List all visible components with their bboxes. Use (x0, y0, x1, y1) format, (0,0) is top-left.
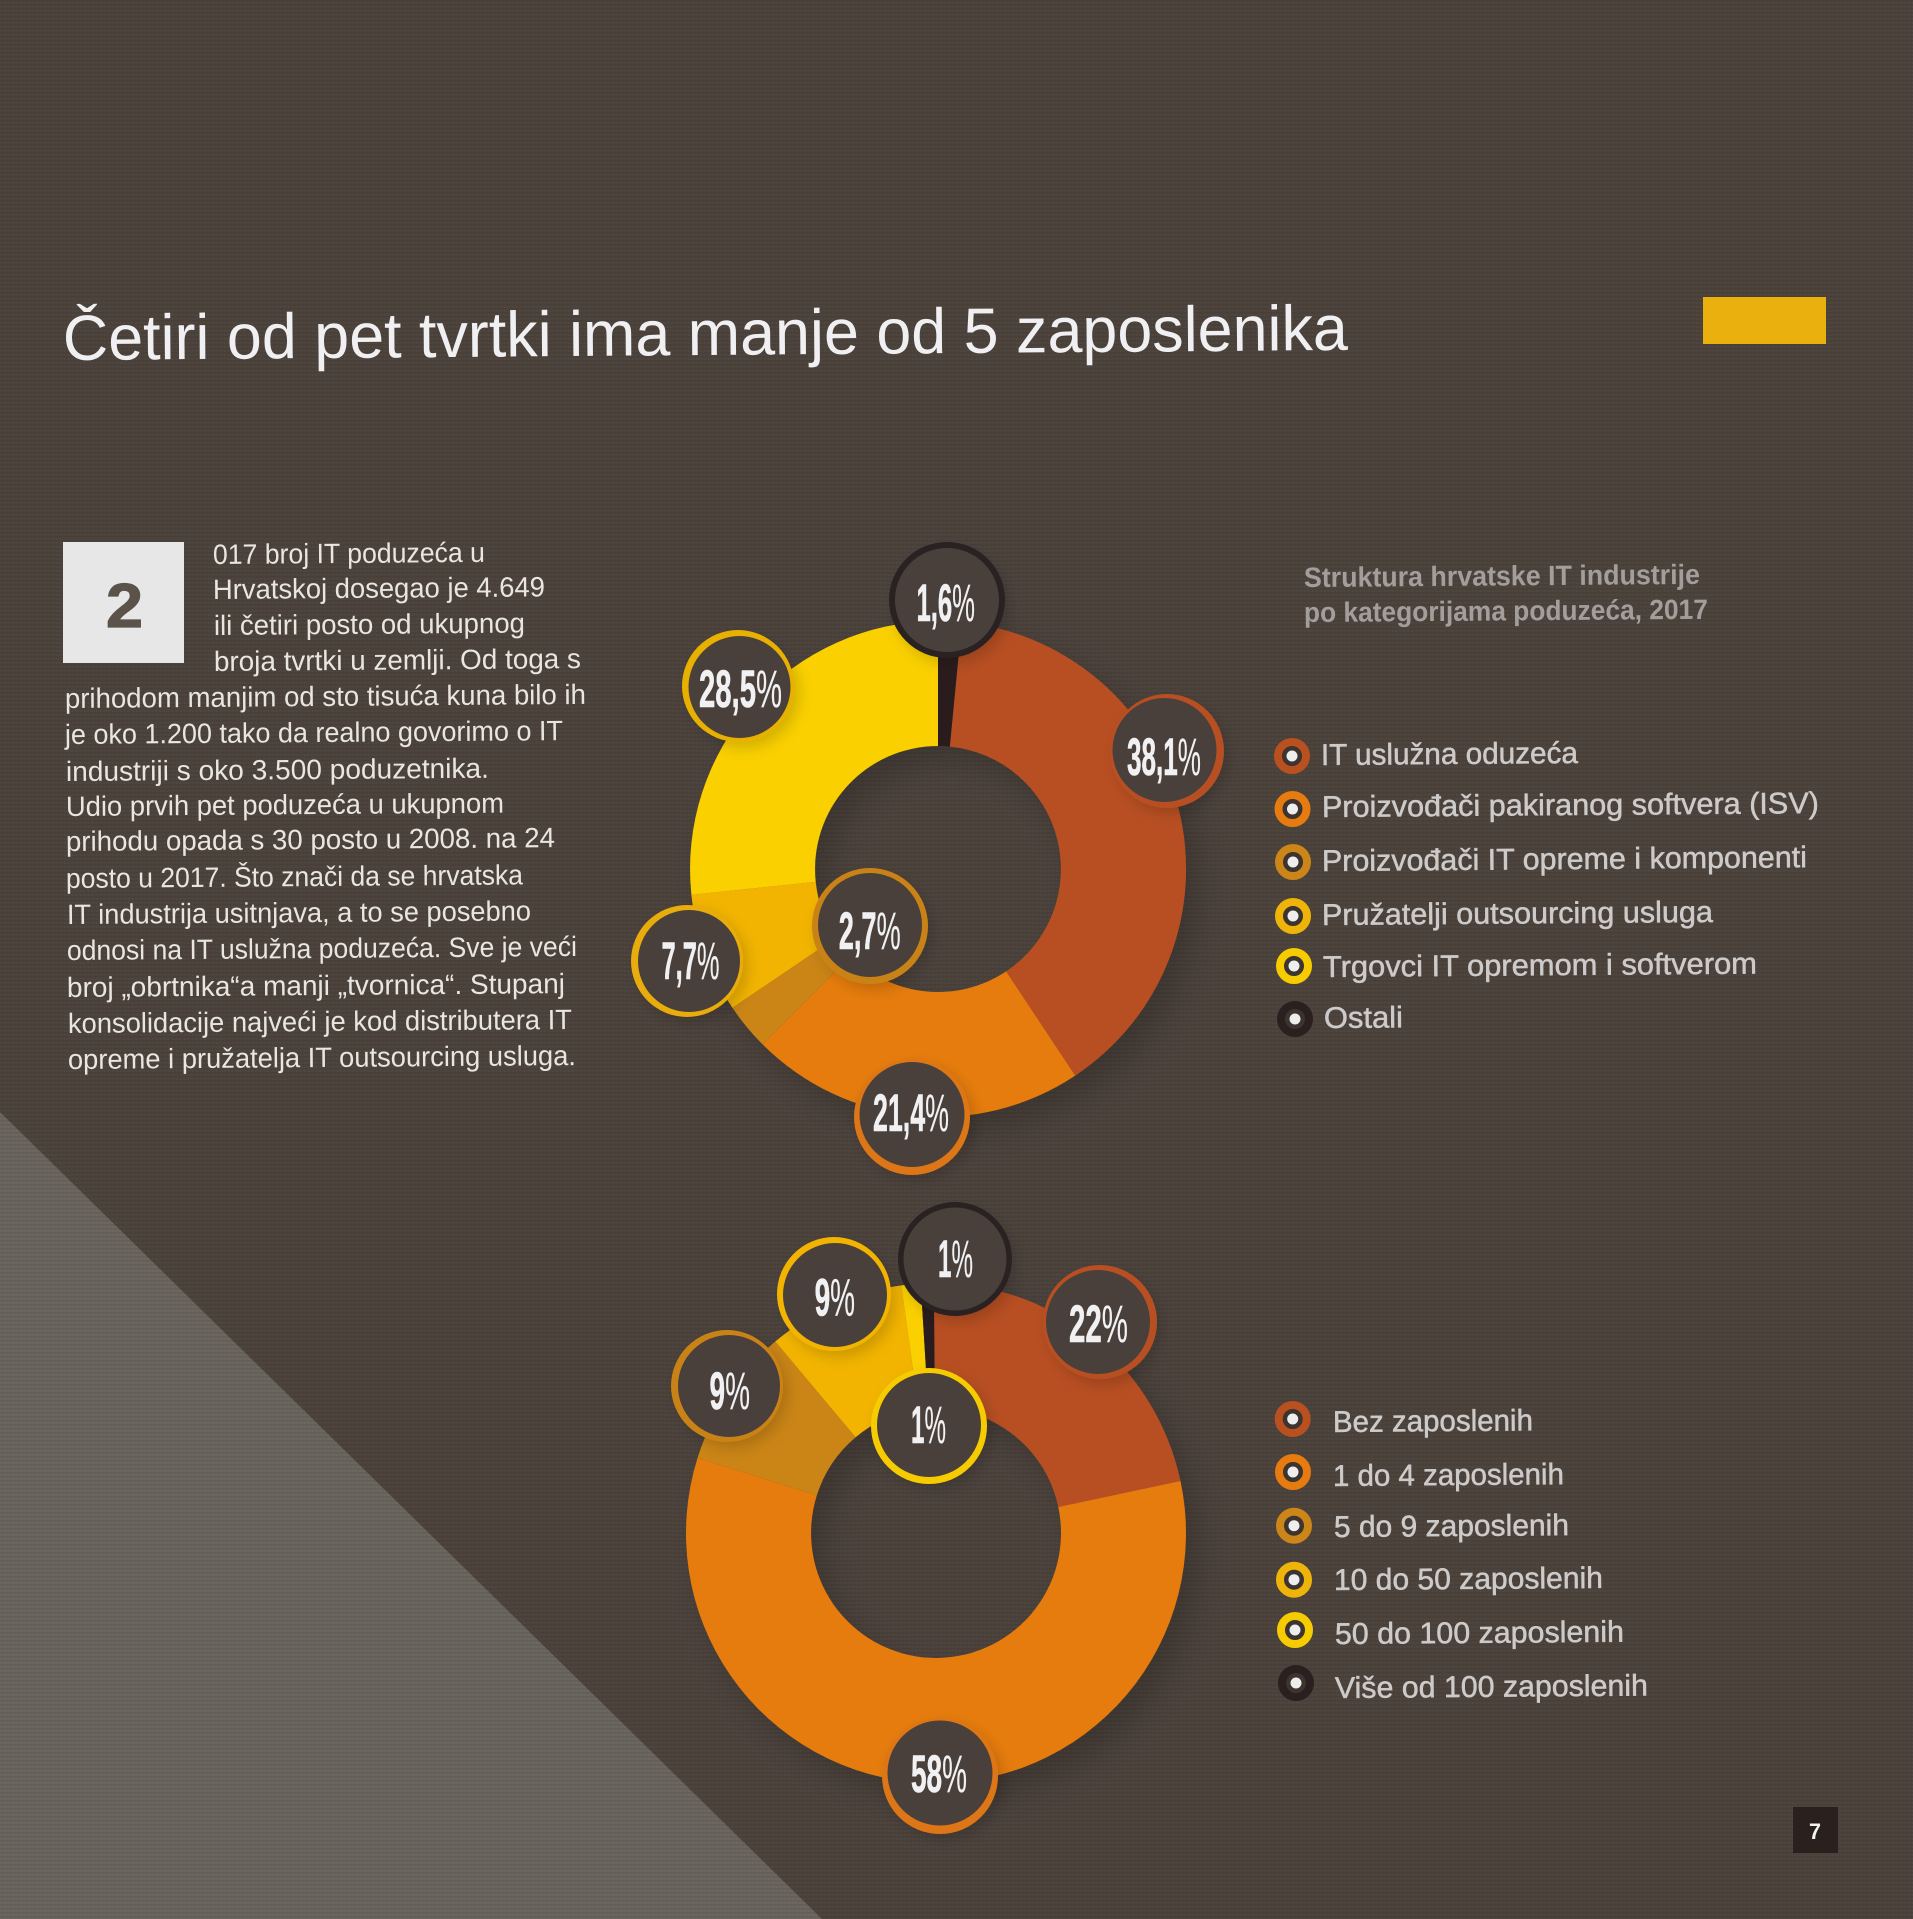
intro text block: broj „obrtnika“a manji „tvornica“. Stupanj (67, 968, 565, 1003)
title: Četiri od pet tvrtki ima manje od 5 zaposlenika (63, 292, 1348, 374)
bubble 38,1% (1110, 694, 1224, 808)
intro text block: prihodu opada s 30 posto u 2008. na 24 (66, 822, 555, 857)
donut rings (690, 621, 1186, 1117)
chart heading: Struktura hrvatske IT industrije (1304, 559, 1700, 593)
intro text block: konsolidacije najveći je kod distributera IT (68, 1004, 572, 1039)
bubble 1,6%: 1,6% (916, 574, 975, 633)
bubble 22%: 22% (1069, 1295, 1128, 1354)
bubble 9% dark amber: 9% (710, 1362, 750, 1421)
intro text block: prihodom manjim od sto tisuća kuna bilo ih (65, 679, 586, 714)
drop-cap box: 2 (106, 572, 143, 641)
slice: packaged software 21.4% (763, 956, 1075, 1117)
bubble 28,5%: 28,5% (699, 660, 782, 719)
yellow accent bar (1703, 297, 1826, 344)
slice: others 1.6% (938, 621, 962, 747)
bubble 1,6% (889, 542, 1005, 658)
legend item: Proizvođači pakiranog softvera: Proizvođači pakiranog softvera (ISV) (1322, 787, 1819, 824)
legend: company categories (1278, 737, 1819, 1035)
bubble 7,7%: 7,7% (662, 932, 720, 991)
slice: no employees 22% (934, 1283, 1180, 1507)
bubble 1% yellow (871, 1368, 987, 1484)
bubble 28,5% (682, 630, 794, 742)
donut rings (686, 1283, 1186, 1783)
legend item: 1 do 4 zaposlenih: 1 do 4 zaposlenih (1333, 1458, 1564, 1493)
bubble 21,4%: 21,4% (873, 1084, 949, 1143)
intro text block: opreme i pružatelja IT outsourcing usluga. (68, 1040, 576, 1075)
legend: employee counts (1279, 1404, 1648, 1705)
slice: IT equipment 2.7% (732, 938, 851, 1044)
intro text block: Udio prvih pet poduzeća u ukupnom (66, 788, 504, 822)
bubble 22% (1043, 1265, 1157, 1379)
slice: IT service companies 38.1% (950, 622, 1186, 1076)
background diagonal grey triangle (0, 1112, 822, 1919)
intro text block: odnosi na IT uslužna poduzeća. Sve je veći (67, 931, 577, 966)
intro text block: broja tvrtki u zemlji. Od toga s (214, 643, 581, 677)
bubble 58% (882, 1718, 998, 1834)
drop-cap box (63, 542, 184, 663)
intro text block: ili četiri posto od ukupnog (214, 608, 525, 641)
legend item: Trgovci IT opremom: Trgovci IT opremom i softverom (1323, 948, 1757, 984)
page number (1793, 1807, 1838, 1853)
bubble 2,7% (812, 868, 928, 984)
slice: 5 to 9 employees 9% (698, 1342, 856, 1495)
bubble 2,7%: 2,7% (839, 902, 901, 961)
bubble 1% dark (898, 1202, 1012, 1316)
intro text block: 017 broj IT poduzeća u (213, 537, 485, 570)
bubble 9% amber: 9% (815, 1268, 855, 1328)
legend item: 10 do 50 zaposlenih: 10 do 50 zaposlenih (1334, 1562, 1603, 1597)
legend item: Više od 100 zaposlenih: Više od 100 zaposlenih (1335, 1670, 1648, 1705)
intro text block: industriji s oko 3.500 poduzetnika. (66, 753, 489, 787)
legend item: 5 do 9 zaposlenih: 5 do 9 zaposlenih (1334, 1509, 1569, 1544)
bubble 1% dark: 1% (938, 1230, 973, 1289)
legend item: Ostali (1281, 1001, 1403, 1035)
legend item: IT uslužna oduzeća: IT uslužna oduzeća (1321, 737, 1578, 772)
bubble 7,7% (631, 905, 743, 1017)
bubble 9% amber (777, 1237, 891, 1351)
donut chart: companies by number of employees (671, 1202, 1186, 1834)
slice: IT retailers 28.5% (690, 621, 938, 895)
intro text block: Hrvatskoj dosegao je 4.649 (213, 571, 545, 605)
legend item: Pružatelji outsourcing usluga: Pružatelji outsourcing usluga (1322, 896, 1713, 932)
slice: 10 to 50 employees 9% (775, 1285, 919, 1437)
intro text block (64, 537, 586, 1075)
slice: 1 to 4 employees 58% (686, 1458, 1186, 1783)
legend item: 50 do 100 zaposlenih: 50 do 100 zaposlenih (1335, 1616, 1624, 1651)
intro text block: IT industrija usitnjava, a to se posebno (67, 895, 531, 930)
bubble 21,4% (854, 1059, 970, 1175)
bubble 58%: 58% (911, 1745, 967, 1804)
intro text block: je oko 1.200 tako da realno govorimo o IT (64, 715, 563, 750)
chart heading (1304, 559, 1708, 628)
intro text block: posto u 2017. Što znači da se hrvatska (66, 859, 523, 894)
legend item: Ostali: Ostali (1324, 1001, 1403, 1035)
bubble 1% yellow: 1% (911, 1396, 946, 1455)
bubble 38,1%: 38,1% (1127, 728, 1201, 787)
legend item: Proizvođači IT opreme: Proizvođači IT opreme i komponenti (1322, 841, 1807, 878)
slice: outsourcing 7.7% (691, 882, 836, 1008)
bubble 9% dark amber (671, 1330, 783, 1442)
legend item: Bez zaposlenih: Bez zaposlenih (1333, 1404, 1533, 1439)
slice: 50 to 100 employees 1% (901, 1284, 928, 1409)
donut chart: IT industry structure by company category (631, 542, 1224, 1175)
page number: 7 (1809, 1819, 1821, 1844)
slice: over 100 employees 1% (921, 1283, 935, 1408)
chart heading: po kategorijama poduzeća, 2017 (1304, 594, 1708, 628)
